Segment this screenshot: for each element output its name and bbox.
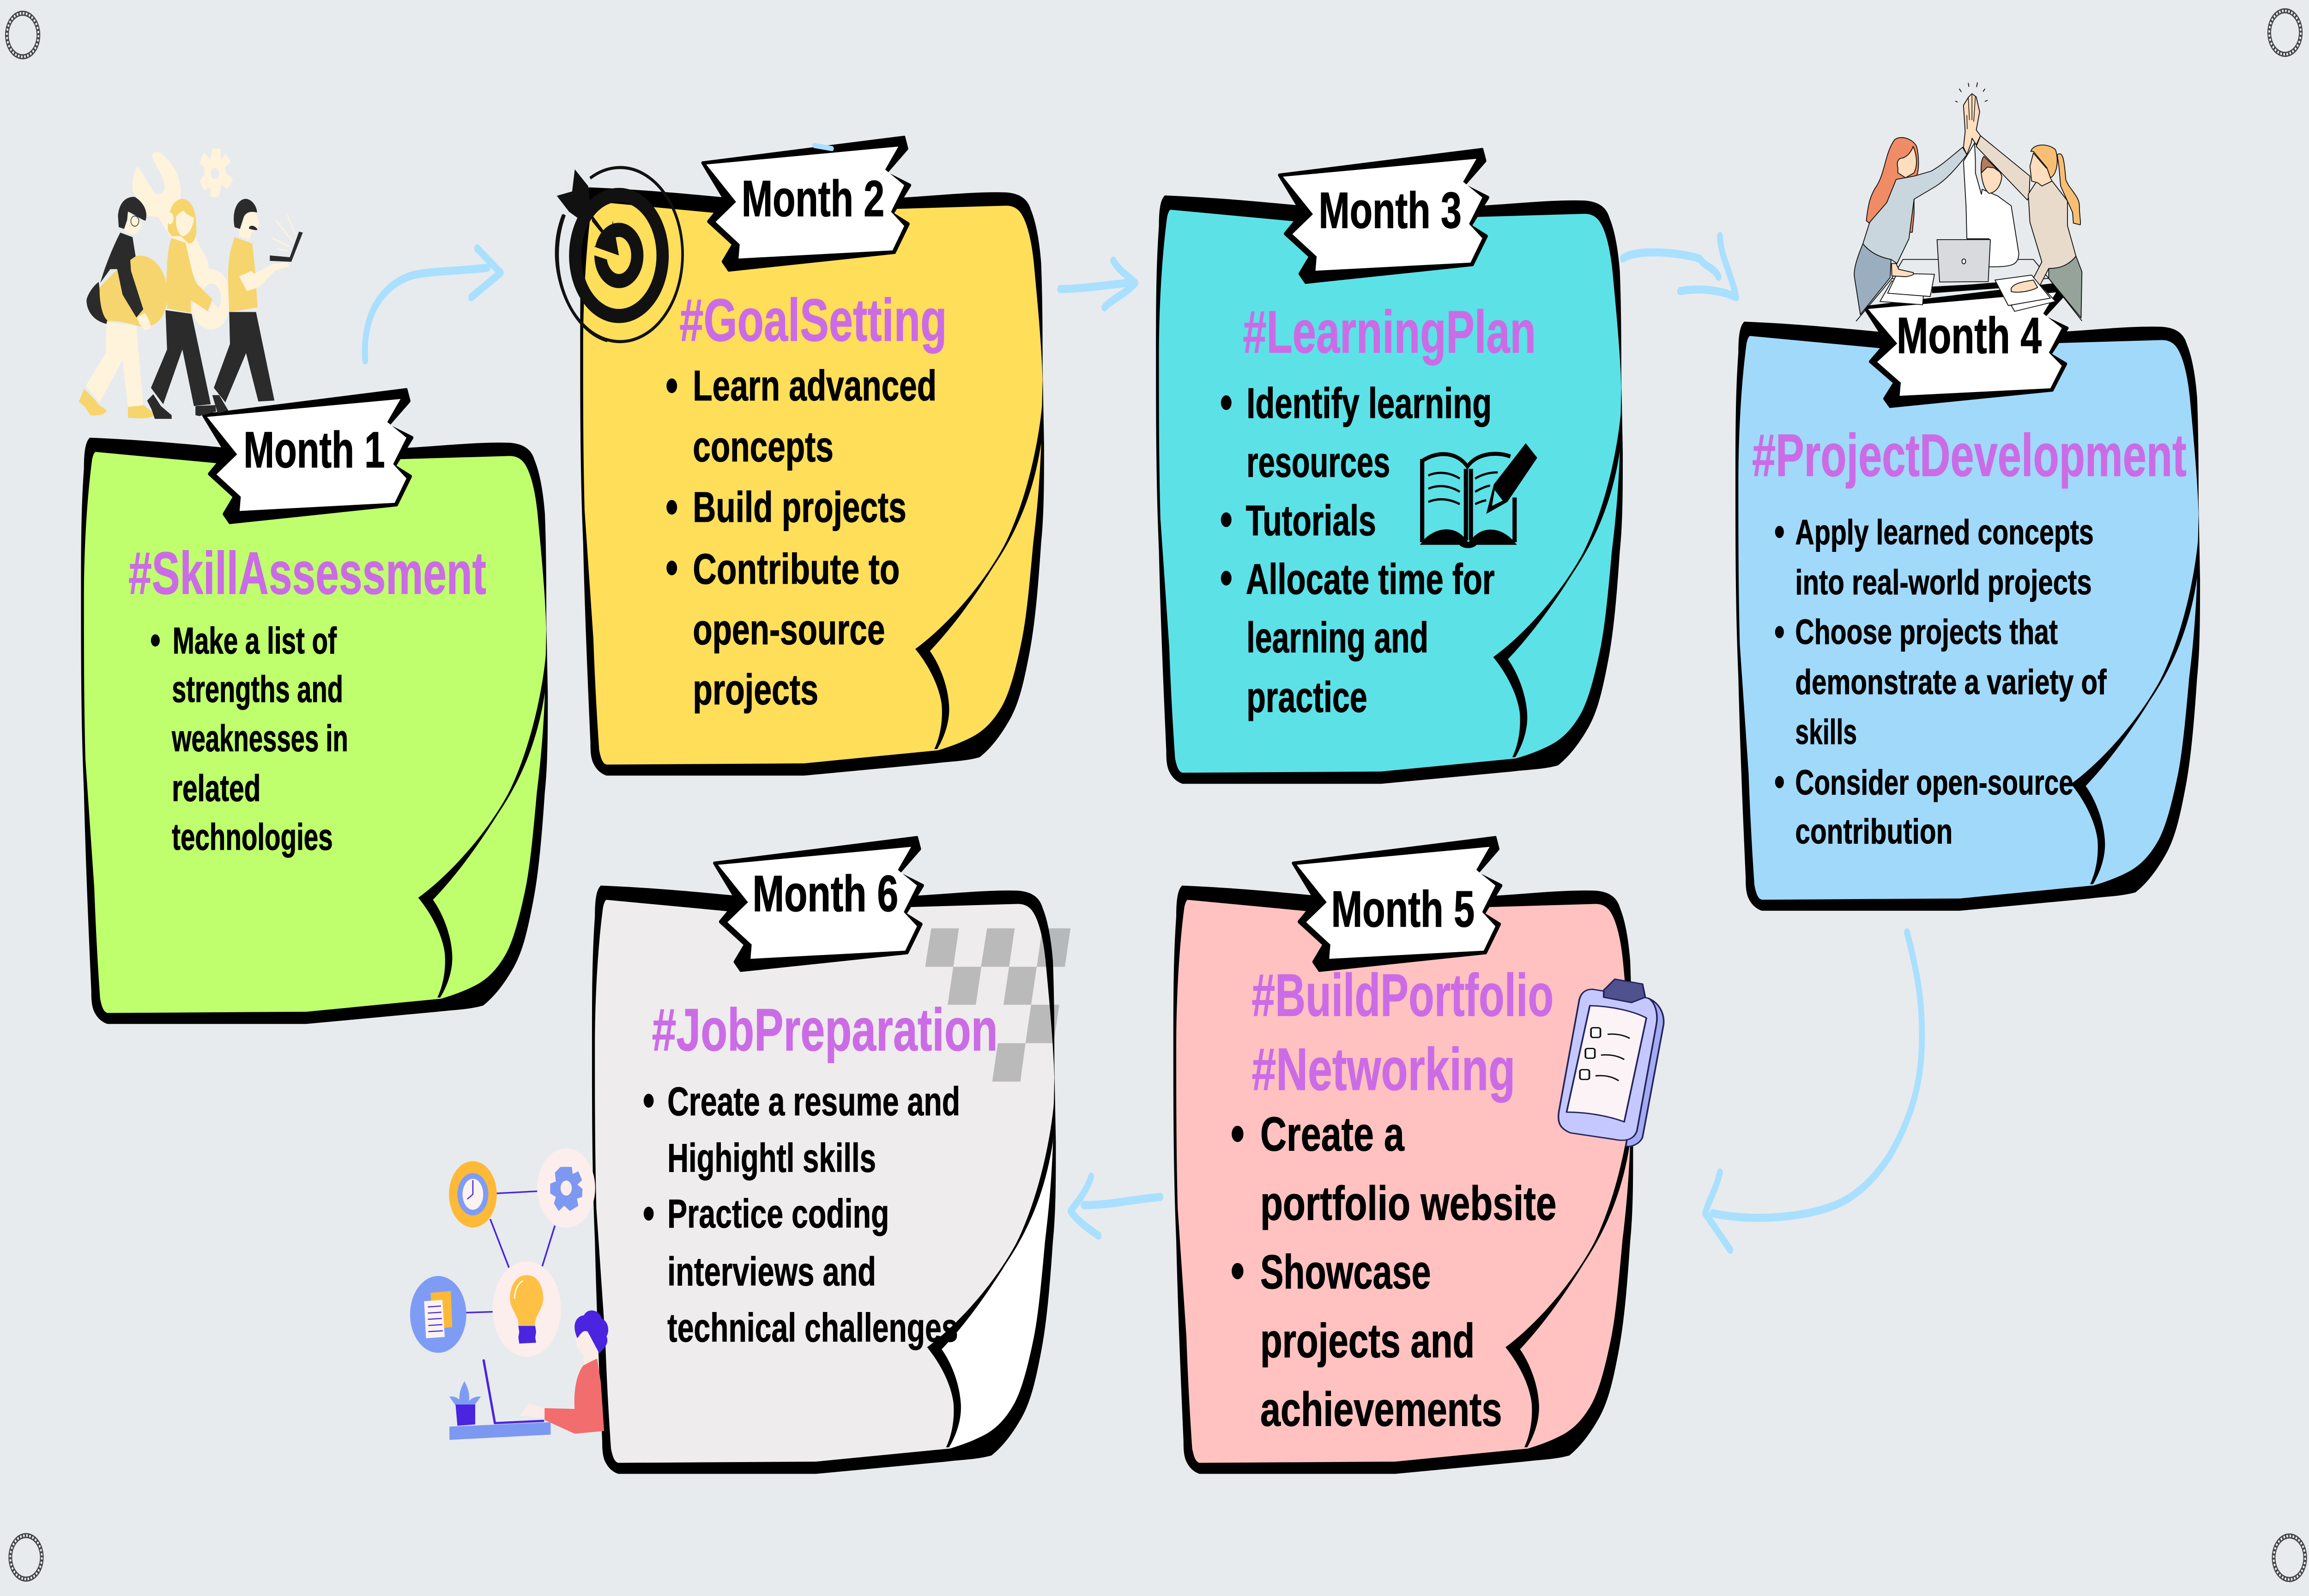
panel: month 5 build portfolio and networking xyxy=(1173,838,1633,1474)
bullet list: concepts xyxy=(693,423,834,471)
note shape: green xyxy=(81,438,548,1024)
bullet list: interviews and xyxy=(667,1249,876,1294)
ribbon: month 5 xyxy=(1293,838,1501,970)
bullet list xyxy=(644,1079,960,1350)
bullet list xyxy=(151,620,348,858)
bullet list xyxy=(1775,513,2107,852)
panel: month 6 job preparation xyxy=(592,838,1070,1474)
heading: networking: #Networking xyxy=(1251,1036,1515,1103)
panel: month 3 learning plan xyxy=(1156,150,1623,784)
bullet list: Create a xyxy=(1260,1108,1404,1161)
arrow: month 1 to month 2 xyxy=(365,248,501,360)
panel: month 1 skill assessment xyxy=(81,390,548,1024)
arrow: month 3 to month 4 xyxy=(1623,236,1736,297)
bullet list: Showcase xyxy=(1260,1245,1431,1299)
bullet list: demonstrate a variety of xyxy=(1795,663,2107,702)
arrow: month 2 to month 3 xyxy=(1060,260,1136,308)
bullet list: Tutorials xyxy=(1246,497,1376,545)
bullet list: Make a list of xyxy=(173,620,337,661)
ribbon: month 4 xyxy=(1864,284,2067,406)
note shape: pink xyxy=(1173,886,1633,1474)
illustration: three people carrying bulb, wrench and laptop xyxy=(79,149,303,419)
bullet list: projects xyxy=(693,666,818,714)
label: month 2: Month 2 xyxy=(742,171,884,227)
bullet list: Build projects xyxy=(693,484,907,531)
bullet list: technical challenges xyxy=(667,1306,958,1350)
heading: skill assessment: #SkillAssessment xyxy=(128,540,486,607)
bullet list: Allocate time for xyxy=(1246,556,1495,603)
panel: month 4 project development xyxy=(1735,83,2200,911)
icon: clipboard checklist xyxy=(1559,979,1664,1146)
illustration: team high five xyxy=(1854,83,2082,321)
note shape: grey xyxy=(592,886,1056,1474)
small blue stroke above month 2 ribbon xyxy=(814,145,832,149)
illustration: person at laptop with idea network xyxy=(410,1149,608,1440)
bullet list xyxy=(666,363,937,714)
arrow: month 5 to month 6 xyxy=(1070,1177,1161,1236)
icon: open book with pencil xyxy=(1420,443,1537,548)
corner ring: top left xyxy=(7,13,38,57)
corner ring: bottom right xyxy=(2273,1536,2305,1579)
ribbon: month 2 xyxy=(702,137,910,270)
heading: job preparation: #JobPreparation xyxy=(652,997,998,1064)
note shape: cyan xyxy=(1156,195,1623,784)
ribbon: month 6 xyxy=(714,838,923,970)
label: month 6: Month 6 xyxy=(752,866,898,922)
bullet list: open-source xyxy=(693,606,885,654)
bullet list: into real-world projects xyxy=(1795,563,2092,602)
bullet list: weaknesses in xyxy=(171,717,348,759)
bullet list: related xyxy=(172,767,260,809)
corner ring: bottom left xyxy=(10,1536,42,1579)
bullet list: Identify learning xyxy=(1246,380,1492,428)
bullet list: technologies xyxy=(172,816,333,858)
label: month 5: Month 5 xyxy=(1331,881,1475,938)
bullet list: resources xyxy=(1246,439,1390,486)
bullet list: skills xyxy=(1795,713,1857,752)
label: month 4: Month 4 xyxy=(1897,308,2042,364)
heading: project development: #ProjectDevelopment xyxy=(1752,422,2187,489)
bullet list: portfolio website xyxy=(1260,1177,1557,1230)
note shape: blue xyxy=(1735,322,2200,911)
bullet list: contribution xyxy=(1795,812,1952,852)
heading: goal setting: #GoalSetting xyxy=(679,287,947,354)
label: month 1: Month 1 xyxy=(243,422,385,478)
heading: learning plan: #LearningPlan xyxy=(1243,299,1536,366)
bullet list: learning and xyxy=(1246,614,1428,662)
note shape: yellow xyxy=(580,187,1044,776)
bullet list: Highightl skills xyxy=(667,1136,876,1181)
panel: month 2 goal setting xyxy=(580,137,1044,776)
corner ring: top right xyxy=(2269,11,2301,54)
bullet list xyxy=(1221,380,1495,721)
bullet list: Create a resume and xyxy=(667,1079,960,1124)
heading: build portfolio: #BuildPortfolio xyxy=(1251,962,1553,1029)
bullet list xyxy=(1232,1108,1557,1436)
bullet list: practice xyxy=(1246,674,1367,721)
bullet list: Contribute to xyxy=(693,545,900,593)
bullet list: Practice coding xyxy=(667,1191,889,1237)
checker pattern xyxy=(925,928,1070,1082)
icon: target with arrow xyxy=(556,168,683,342)
bullet list: achievements xyxy=(1260,1383,1502,1436)
arrow: month 4 to month 5 xyxy=(1705,932,1922,1250)
label: month 3: Month 3 xyxy=(1319,182,1462,239)
bullet list: Apply learned concepts xyxy=(1795,513,2094,552)
bullet list: Consider open-source xyxy=(1795,763,2073,803)
ribbon: month 1 xyxy=(203,390,412,523)
bullet list: Learn advanced xyxy=(693,363,937,410)
bullet list: Choose projects that xyxy=(1795,613,2058,652)
bullet list: strengths and xyxy=(172,668,343,710)
ribbon: month 3 xyxy=(1279,150,1488,282)
bullet list: projects and xyxy=(1260,1314,1475,1368)
